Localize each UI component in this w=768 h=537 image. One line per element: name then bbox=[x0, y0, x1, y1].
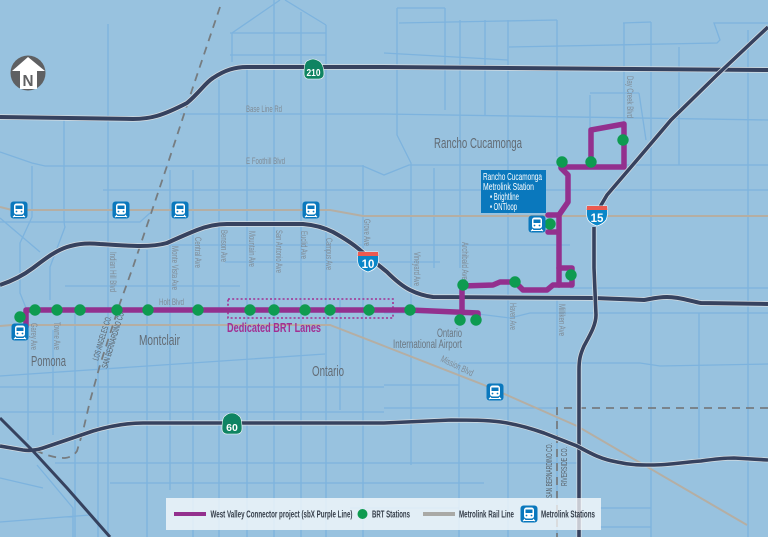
shield: I-15: 15 bbox=[591, 213, 604, 225]
BRT stations bbox=[14, 134, 629, 326]
shield: CA 60 bbox=[222, 413, 242, 434]
callout: Rancho Cucamonga Metrolink Station: • ONTloop bbox=[490, 202, 517, 213]
city labels: Ontario bbox=[312, 364, 344, 380]
legend: BRT stations: BRT Stations bbox=[372, 510, 410, 520]
shield: I-15 bbox=[586, 206, 608, 226]
dedicated BRT lanes label: Dedicated BRT Lanes bbox=[227, 320, 321, 335]
street labels: Euclid Ave bbox=[298, 231, 309, 259]
shield: CA 210: 210 bbox=[306, 68, 321, 79]
street labels: E Foothill Blvd bbox=[246, 156, 285, 167]
city labels: Rancho Cucamonga bbox=[434, 136, 523, 152]
street labels: Garey Ave bbox=[28, 323, 39, 350]
callout: Rancho Cucamonga Metrolink Station bbox=[481, 170, 546, 213]
street labels: Towne Ave bbox=[51, 322, 62, 350]
street labels: Mountain Ave bbox=[246, 231, 257, 267]
freeway diagonal southwest bbox=[0, 418, 110, 537]
street labels bbox=[28, 76, 635, 379]
freeway 10 bbox=[0, 224, 768, 304]
airport label bbox=[393, 328, 463, 351]
freeway 210 bbox=[0, 67, 768, 119]
street labels: Base Line Rd bbox=[246, 104, 282, 115]
Metrolink rail line bbox=[0, 207, 768, 525]
airport label: International Airport bbox=[393, 339, 463, 351]
city labels: Montclair bbox=[139, 333, 180, 349]
street labels: Mission Blvd bbox=[439, 354, 475, 379]
shield: CA 60: 60 bbox=[226, 422, 238, 434]
callout: Rancho Cucamonga Metrolink Station: Metrolink Station bbox=[483, 182, 534, 193]
street labels: Haven Ave bbox=[507, 303, 518, 330]
county labels: SAN BERNARDINO CO. bbox=[99, 309, 126, 370]
street labels: Grove Ave bbox=[361, 219, 372, 246]
legend: Metrolink stations: Metrolink Stations bbox=[541, 510, 595, 520]
purple line route bbox=[26, 124, 624, 327]
Metrolink stations bbox=[10, 202, 546, 400]
street labels: Campus Ave bbox=[323, 238, 334, 270]
street labels: Indian Hill Blvd bbox=[107, 252, 118, 292]
street labels: Holt Blvd bbox=[159, 297, 184, 308]
callout: Rancho Cucamonga Metrolink Station: • Brightline bbox=[490, 192, 519, 203]
street labels: Monte Vista Ave bbox=[169, 246, 180, 290]
legend: West Valley Connector: West Valley Connector project (sbX Purple Line) bbox=[210, 510, 352, 520]
street labels: Vineyard Ave bbox=[411, 252, 422, 286]
legend bbox=[166, 498, 601, 530]
airport label: Ontario bbox=[437, 328, 462, 340]
city labels: Pomona bbox=[31, 354, 67, 370]
shield: I-10: 10 bbox=[362, 259, 374, 271]
county labels: SAN BERNARDINO CO. bbox=[544, 443, 554, 498]
shield: CA 210 bbox=[304, 59, 324, 79]
county labels bbox=[90, 309, 569, 498]
street labels: Central Ave bbox=[192, 237, 203, 268]
street labels: Milliken Ave bbox=[556, 304, 567, 336]
legend: Metrolink rail line: Metrolink Rail Line bbox=[459, 510, 514, 520]
county line: San Bernardino / Riverside bbox=[557, 408, 768, 537]
street labels: Day Creek Blvd bbox=[624, 76, 635, 118]
county labels: LOS ANGELES CO. bbox=[90, 315, 113, 362]
icon: north arrow: N bbox=[22, 73, 34, 90]
legend: BRT stations bbox=[358, 509, 410, 520]
county labels: RIVERSIDE CO. bbox=[559, 447, 569, 486]
freeway 15 bbox=[579, 27, 768, 537]
street labels: Archibald Ave bbox=[459, 242, 470, 280]
callout: Rancho Cucamonga Metrolink Station: Rancho Cucamonga bbox=[483, 172, 542, 183]
dedicated BRT lanes dotted box bbox=[228, 299, 393, 318]
shield: I-10 bbox=[357, 252, 379, 272]
street labels: Benson Ave bbox=[218, 230, 229, 262]
county line: Los Angeles / San Bernardino bbox=[37, 7, 220, 458]
city labels bbox=[31, 136, 523, 380]
legend: Metrolink rail line bbox=[423, 510, 514, 520]
legend: Metrolink stations bbox=[520, 506, 595, 522]
freeway 60 bbox=[0, 420, 768, 465]
street labels: San Antonio Ave bbox=[273, 230, 284, 273]
legend: West Valley Connector bbox=[174, 510, 352, 520]
icon: north arrow bbox=[10, 56, 46, 90]
